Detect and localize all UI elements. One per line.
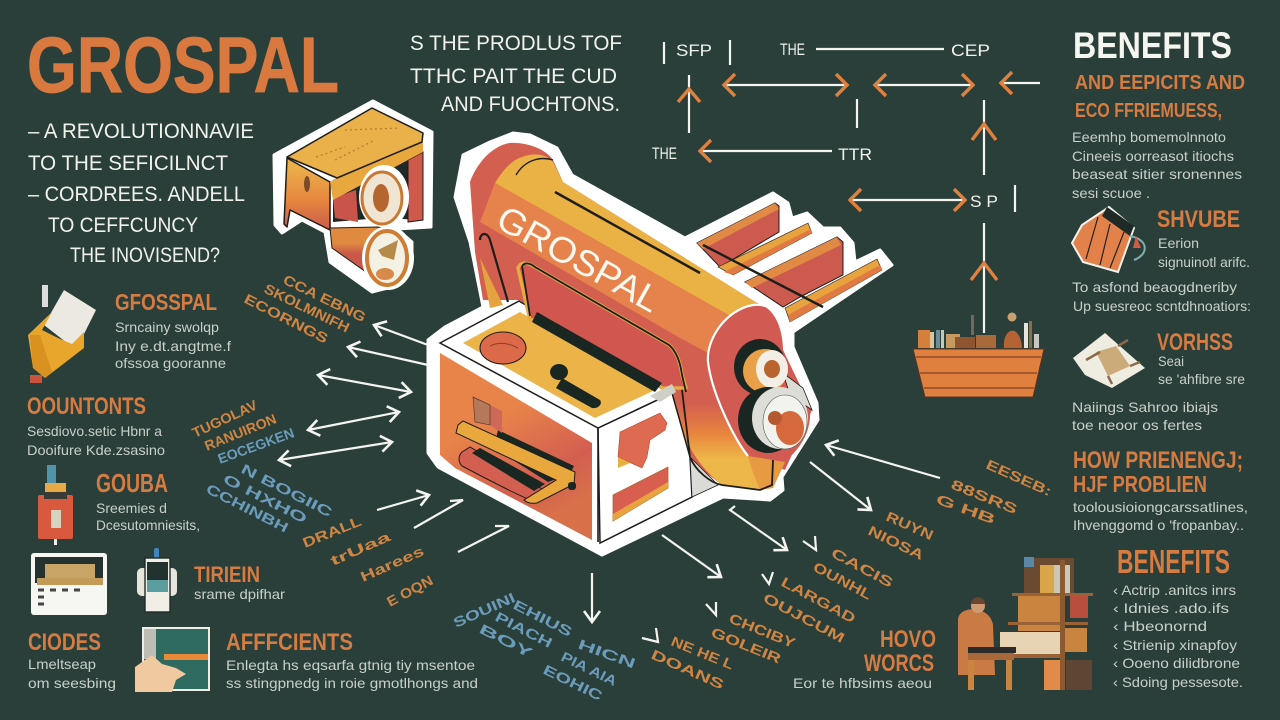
left section: OOUNTONTS: OOUNTONTS	[27, 393, 146, 420]
label cluster: lower left orange: E OQN	[384, 572, 436, 610]
machine roller body	[470, 143, 810, 490]
label cluster: left blue: N BOGIIC	[239, 460, 335, 520]
small machine dark interior	[333, 142, 423, 222]
left: icon device	[38, 465, 73, 545]
label cluster: bottom orange F: OUNHL	[811, 559, 875, 603]
arrow 12	[810, 462, 871, 510]
section: SHVUBE: Eerion	[1158, 235, 1199, 251]
right column: paragraph: sesi scuoe .	[1072, 185, 1150, 201]
small machine cylinder	[330, 227, 397, 272]
benefits list: ‹ Actrip .anitcs inrs	[1113, 582, 1236, 598]
label cluster: bottom orange E: OUJCUM	[761, 590, 848, 646]
label cluster: bottom orange D: GOLEIR	[709, 624, 783, 667]
label cluster: mid left mixed: TUGOLAV	[190, 396, 260, 441]
arrow 1	[374, 325, 428, 345]
arrow 13	[826, 445, 940, 478]
section: how prienengj: HJF PROBLIEN	[1073, 471, 1207, 497]
panel black strip	[532, 312, 662, 392]
icon: basket	[913, 312, 1044, 397]
machine fins	[697, 203, 882, 322]
benefits list: ‹ Strienip xinapfoy	[1113, 637, 1237, 653]
lower benefits heading: BENEFITS	[1117, 543, 1230, 580]
label cluster: lower left orange: Harees	[358, 542, 427, 585]
label cluster: bottom blue A: PIACH	[493, 608, 555, 651]
section: SHVUBE	[1072, 206, 1251, 314]
section: SHVUBE: Up suesreoc scntdhnoatiors:	[1073, 298, 1251, 314]
arrow 8	[458, 526, 509, 552]
label cluster: mid left mixed	[190, 396, 296, 467]
label cluster: bottom blue A: EHIUS	[511, 596, 575, 640]
left section: CIODES: om seesbing	[28, 675, 116, 691]
left section: CIODES: Lmeltseap	[28, 656, 96, 672]
left section: GFOSSPAL: ofssoa gooranne	[115, 355, 226, 371]
left section: OOUNTONTS: Dooifure Kde.zsasino	[27, 442, 165, 458]
small machine sticker outline	[274, 101, 432, 292]
label cluster: bottom blue B: PIA AIA	[559, 648, 620, 689]
section: VORHSS: toe neoor os fertes	[1072, 417, 1202, 433]
benefits list: ‹ Hbeonornd	[1113, 618, 1207, 634]
left: icon hand with panel	[135, 628, 209, 692]
arrow: flow to basket	[971, 223, 997, 333]
intro text block: TO THE SEFICILNCT	[28, 152, 228, 175]
section: SHVUBE: signuinotl arifc.	[1158, 254, 1250, 270]
section: HOVO WORCS: WORCS	[864, 650, 934, 677]
flow diagram	[652, 40, 1040, 333]
end cap	[708, 304, 812, 470]
arrow 9	[591, 573, 593, 622]
arrow 11	[730, 506, 787, 550]
arrow 3	[318, 375, 411, 392]
label cluster: bottom orange F: CACIS	[829, 545, 896, 591]
machine brand label: GROSPAL	[490, 197, 667, 320]
small machine roller one	[359, 165, 409, 229]
intro text block: – CORDREES. ANDELL	[28, 183, 245, 206]
section: VORHSS: Seai	[1158, 353, 1184, 369]
roller lower	[738, 387, 808, 453]
label cluster: bottom orange E: LARGAD	[779, 574, 859, 626]
arrow: flow up right	[972, 100, 996, 175]
label cluster: right orange G: RUYN	[884, 508, 936, 543]
small machine front	[284, 158, 330, 230]
label cluster: bottom orange D	[709, 610, 799, 667]
flow label: THE top: THE	[780, 40, 805, 59]
section: VORHSS: se 'ahfibre sre	[1158, 371, 1245, 387]
section: how prienengj: toolousioiongcarssatlines,	[1073, 499, 1248, 515]
label cluster: mid left mixed: RANUIRON	[202, 410, 279, 454]
left section: AFFFCIENTS	[226, 629, 478, 691]
intro text block: – A REVOLUTIONNAVIE	[28, 120, 254, 143]
left section: GFOSSPAL: GFOSSPAL	[115, 289, 217, 315]
small machine top	[287, 108, 423, 178]
arrow: flow up left	[678, 75, 700, 133]
red knob	[480, 332, 526, 364]
label cluster: bottom blue A: BOY	[477, 620, 537, 662]
right face red shapes	[613, 413, 668, 521]
top centre text block: S THE PRODLUS TOF	[410, 32, 622, 55]
label cluster: top left orange	[242, 271, 369, 346]
left section: TIRIEIN: TIRIEIN	[194, 562, 260, 587]
left section: GFOSSPAL: Srncainy swolqp	[115, 319, 219, 335]
small machine top dots	[316, 128, 400, 160]
grey side panel	[690, 457, 718, 497]
left section: OOUNTONTS	[27, 393, 165, 458]
box left face	[440, 353, 592, 540]
flow label: CEP: CEP	[951, 41, 990, 60]
small machine latch	[304, 176, 310, 192]
icon: bag	[1072, 207, 1145, 272]
grey roller block	[783, 373, 812, 410]
left: icon control panel	[31, 553, 107, 615]
arrowhead c	[706, 602, 716, 615]
label cluster: right orange H: EESEB:	[984, 456, 1054, 499]
label cluster: lower left orange: DRALL	[300, 513, 364, 551]
label cluster: bottom blue B	[541, 636, 638, 704]
label cluster: lower left orange: trUaa	[328, 528, 393, 569]
flow label: SFP: SFP	[676, 41, 712, 60]
label cluster: bottom orange E	[761, 574, 859, 646]
benefits list: ‹ Sdoing pessesote.	[1113, 674, 1243, 690]
left section: OOUNTONTS: Sesdiovo.setic Hbnr a	[27, 423, 162, 439]
intro text block: TO CEFFCUNCY	[48, 214, 198, 237]
cap white line	[708, 305, 777, 456]
left section: GOUBA	[96, 468, 200, 533]
intro text block: THE INOVISEND?	[70, 244, 220, 267]
section: HOVO WORCS	[793, 626, 936, 691]
left section: CIODES: CIODES	[28, 629, 101, 656]
left section: GOUBA: GOUBA	[96, 468, 168, 498]
body lower gradient	[660, 340, 773, 490]
section: VORHSS	[1072, 329, 1245, 433]
right column: benefits heading: BENEFITS	[1073, 25, 1232, 66]
left section: GFOSSPAL: Iny e.dt.angtme.f	[115, 338, 231, 354]
right column: paragraph: beaseat sitier sronennes	[1072, 166, 1242, 182]
right column: paragraph: Cineeis oorreasot itiochs	[1072, 148, 1234, 164]
benefits list: ‹ Idnies .ado.ifs	[1113, 600, 1229, 616]
label cluster: left blue: O HXHO	[221, 470, 310, 527]
small machine illustration	[274, 101, 432, 292]
flow label: TTR: TTR	[838, 145, 872, 164]
section: HOVO WORCS: HOVO	[880, 626, 936, 653]
body orange band	[480, 183, 732, 353]
section: how prienengj	[1073, 447, 1248, 533]
arrow 6	[377, 495, 429, 510]
left section: CIODES	[28, 629, 116, 691]
flow label: THE lower: THE	[652, 144, 677, 163]
main machine illustration	[428, 133, 892, 555]
left section: GFOSSPAL	[115, 289, 231, 371]
left section: GOUBA: Sreemies d	[96, 500, 167, 516]
arrow: flow 2	[875, 84, 973, 86]
body left strap	[480, 234, 508, 308]
label cluster: mid left mixed: EOCEGKEN	[216, 424, 296, 467]
small machine inner red	[333, 190, 358, 222]
arrow: flow 4	[700, 150, 832, 152]
black lever	[550, 364, 601, 408]
left section: TIRIEIN: srame dpifhar	[194, 586, 285, 602]
arrows around machine	[279, 325, 940, 642]
label cluster: top left orange: SKOLMNIFH	[262, 280, 352, 335]
roller upper	[734, 339, 788, 395]
small machine right leg	[408, 152, 423, 222]
title: GROSPAL	[27, 20, 339, 109]
cap bottom	[748, 456, 785, 490]
label cluster: right orange G	[866, 508, 936, 563]
section: VORHSS: VORHSS	[1157, 329, 1233, 356]
label cluster: right orange H: 88SRS	[949, 476, 1020, 517]
icon: circuit plate	[1073, 333, 1145, 388]
body yellow band	[495, 155, 757, 317]
left: icon printer	[137, 548, 177, 612]
right column: paragraph: Eeemhp bomemolnnoto	[1072, 129, 1226, 145]
label cluster: top left orange: CCA EBNG	[281, 271, 369, 325]
arrowhead a	[803, 536, 816, 550]
label cluster: right orange H: G HB	[934, 491, 998, 527]
section: SHVUBE: To asfond beaogdneriby	[1072, 279, 1237, 295]
right column: paragraph	[1072, 129, 1242, 201]
arrow 4	[308, 412, 399, 430]
flow label: SP: S P	[970, 192, 998, 211]
arrow: flow 5	[850, 199, 965, 201]
arrowhead b	[762, 572, 773, 584]
label cluster: left blue: CCHINBH	[204, 480, 291, 536]
box top face	[440, 301, 672, 428]
arrow 2	[348, 347, 428, 365]
section: SHVUBE: SHVUBE	[1157, 206, 1240, 233]
arrow 10	[662, 535, 721, 577]
icon: person at desk with shelves	[958, 557, 1093, 690]
label cluster: bottom orange F	[811, 545, 896, 603]
section: HOVO WORCS: Eor te hfbsims aeou	[793, 675, 932, 691]
label cluster: bottom blue B: HICN	[576, 636, 638, 671]
left: icon hand with card	[28, 285, 96, 383]
top centre text block	[410, 32, 622, 116]
section: VORHSS: Naiings Sahroo ibiajs	[1072, 399, 1218, 415]
arrow 7	[414, 500, 463, 528]
right column: subheading: AND EEPICITS AND	[1075, 72, 1245, 94]
arrow 5	[279, 442, 392, 460]
section: how prienengj: HOW PRIENENGJ;	[1073, 447, 1243, 474]
top centre text block: TTHC PAIT THE CUD	[410, 65, 617, 88]
body seam line	[555, 192, 700, 273]
left face handle	[456, 421, 576, 503]
small machine roller two	[362, 226, 414, 290]
box right face	[598, 393, 692, 543]
label cluster: bottom orange C	[649, 633, 737, 692]
benefits list	[1113, 582, 1243, 690]
label cluster: bottom orange D: CHCIBY	[727, 610, 799, 651]
label cluster: lower left orange	[300, 513, 436, 610]
arrow: flow 3	[1001, 82, 1040, 84]
machine sticker outline	[428, 133, 892, 555]
label cluster: right orange H	[934, 456, 1054, 527]
label cluster: left blue	[204, 460, 335, 536]
left section: AFFFCIENTS: Enlegta hs eqsarfa gtnig tiy msentoe	[226, 657, 475, 673]
left section: AFFFCIENTS: AFFFCIENTS	[226, 629, 353, 656]
label cluster: bottom orange C: NE HE L	[669, 633, 737, 673]
intro text block	[28, 120, 254, 267]
panel grey latch	[650, 384, 676, 402]
benefits list: ‹ Ooeno dilidbrone	[1113, 655, 1240, 671]
left face switch	[473, 397, 502, 433]
body outline edge	[643, 330, 773, 490]
left section: TIRIEIN	[194, 562, 285, 602]
arrow: flow 1	[724, 84, 847, 86]
right column: subheading	[1075, 72, 1245, 122]
isometric labels around machine	[190, 271, 1054, 704]
section: how prienengj: Ihvenggomd o 'fropanbay..	[1073, 517, 1244, 533]
arrowhead d	[642, 628, 658, 642]
small machine yellow underside	[330, 142, 423, 200]
label cluster: bottom blue B: EOHIC	[541, 661, 605, 704]
left section: GOUBA: Dcesutomniesits,	[96, 517, 200, 533]
label cluster: bottom orange C: DOANS	[649, 646, 727, 692]
label cluster: bottom blue A: SOUINI	[451, 589, 518, 631]
recessed panel	[518, 263, 686, 388]
left section: AFFFCIENTS: ss stingpnedg in roie gmotlhongs and	[226, 675, 478, 691]
label cluster: right orange G: NIOSA	[866, 522, 927, 563]
label cluster: bottom blue A	[451, 589, 575, 662]
top centre text block: AND FUOCHTONS.	[441, 93, 620, 116]
label cluster: top left orange: ECORNGS	[242, 290, 331, 346]
right column: subheading: ECO FFRIEMUESS,	[1075, 100, 1222, 122]
